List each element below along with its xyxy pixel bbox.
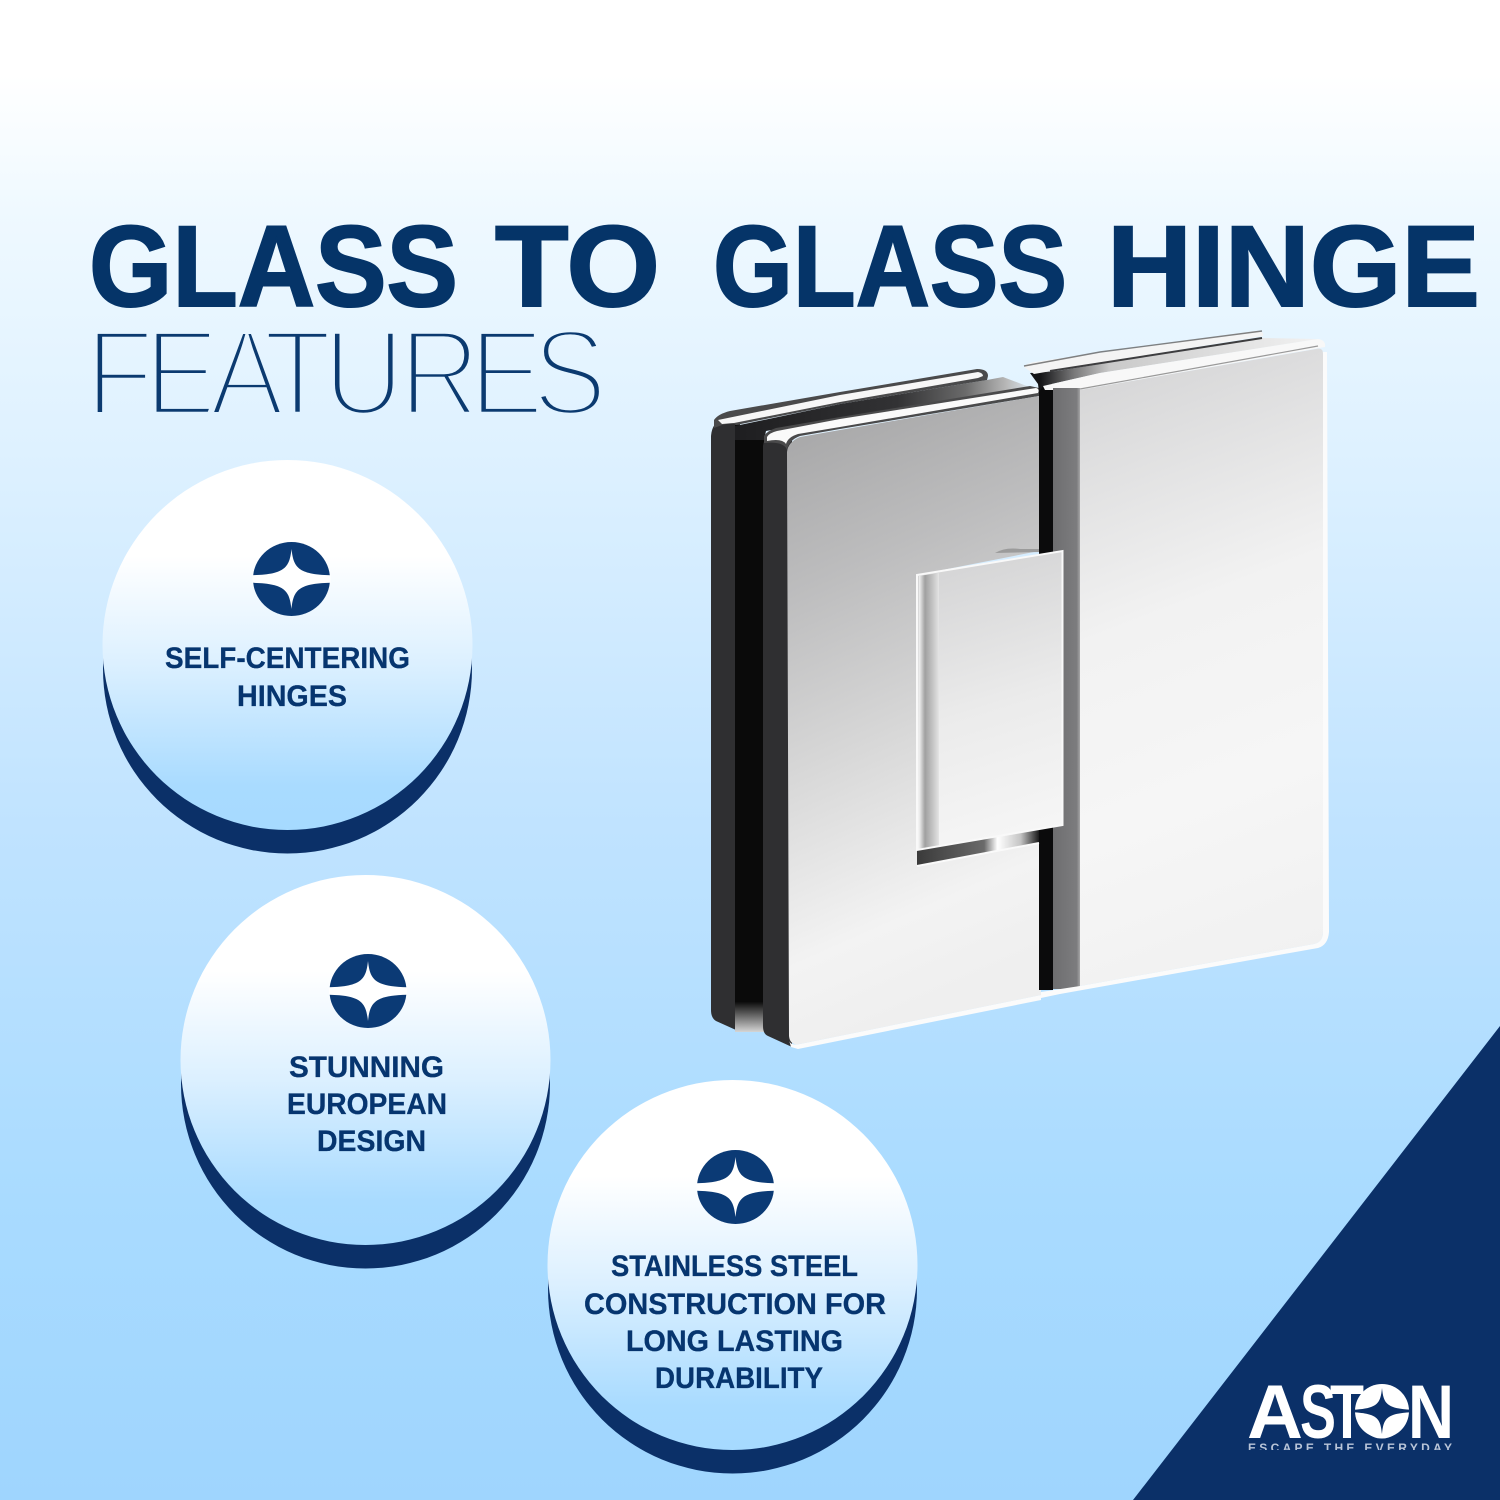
- plate bottom edge: [789, 995, 1041, 1049]
- feature 1: self-centering hinges: [102, 460, 472, 854]
- corner triangle: [1133, 1026, 1500, 1500]
- back rail outline: [714, 369, 988, 428]
- white rail right: [1043, 339, 1325, 390]
- heading: glass to glass hinge: TO: [495, 203, 660, 331]
- knuckle face: [917, 551, 1062, 850]
- black channel: [1039, 384, 1053, 990]
- wordmark: A: [1247, 1370, 1303, 1455]
- title: [85, 203, 1480, 441]
- front left plate: [787, 396, 1041, 1044]
- wordmark: N: [1408, 1370, 1454, 1455]
- shadow crescent: [548, 1104, 917, 1474]
- label: EUROPEAN: [287, 1088, 447, 1121]
- disc: [548, 1080, 918, 1450]
- wordmark: S: [1300, 1370, 1336, 1455]
- disc: [102, 460, 472, 830]
- shadow crescent: [103, 484, 472, 854]
- label: HINGES: [237, 680, 347, 713]
- shadow crescent: [181, 900, 550, 1268]
- right top cap: [1024, 331, 1263, 374]
- logo: aston: [1248, 1384, 1452, 1450]
- line under cap: [1050, 338, 1262, 371]
- subheading: features: FEATURES: [85, 304, 607, 441]
- back rail white stripe: [718, 372, 983, 424]
- feature 2: stunning european design: [180, 875, 550, 1268]
- knuckle top shine: [995, 548, 1039, 553]
- icon: star badge: [329, 954, 407, 1028]
- icon: star badge: [252, 542, 330, 616]
- label: CONSTRUCTION FOR: [584, 1288, 886, 1321]
- wordmark: T: [1330, 1370, 1364, 1455]
- grey strip: [1053, 388, 1080, 989]
- label: STAINLESS STEEL: [611, 1250, 858, 1283]
- tagline: ESCAPE THE EVERYDAY: [1248, 1441, 1452, 1455]
- icon: star badge: [696, 1150, 774, 1224]
- label: [165, 642, 410, 713]
- gap between plates: [735, 425, 764, 1032]
- knuckle left bevel: [919, 573, 939, 850]
- knuckle outline: [917, 551, 1062, 850]
- label: [584, 1250, 886, 1395]
- logo star badge: [1353, 1384, 1411, 1438]
- gap below knuckle: [917, 829, 1039, 866]
- back plate side: [711, 416, 740, 1031]
- heading: glass to glass hinge: GLASS: [89, 203, 458, 331]
- wedge under cap: [1030, 338, 1318, 392]
- wordmark: O: [1358, 1370, 1406, 1455]
- hinge product illustration: [711, 331, 1329, 1049]
- heading: glass to glass hinge: GLASS: [713, 203, 1067, 331]
- wordmark: [1247, 1370, 1454, 1455]
- cap top line: [1024, 331, 1262, 366]
- plate edge below knuckle: [917, 843, 1039, 866]
- label: STUNNING: [289, 1051, 444, 1084]
- label: DURABILITY: [655, 1362, 823, 1395]
- label: LONG LASTING: [626, 1325, 843, 1358]
- label: DESIGN: [317, 1125, 426, 1158]
- front rail outline: [764, 386, 1039, 450]
- disc: [180, 875, 550, 1245]
- right plate: [1080, 349, 1323, 986]
- label: SELF-CENTERING: [165, 642, 410, 675]
- right plate lower edge: [1041, 352, 1329, 998]
- front rail white: [767, 388, 1039, 444]
- feature 3: stainless steel construction: [548, 1080, 918, 1474]
- dark line along plate top: [1080, 346, 1318, 389]
- front plate side: [763, 430, 792, 1047]
- label: [287, 1051, 447, 1158]
- heading: glass to glass hinge: HINGE: [1107, 203, 1480, 331]
- mid band between rails: [735, 377, 1032, 440]
